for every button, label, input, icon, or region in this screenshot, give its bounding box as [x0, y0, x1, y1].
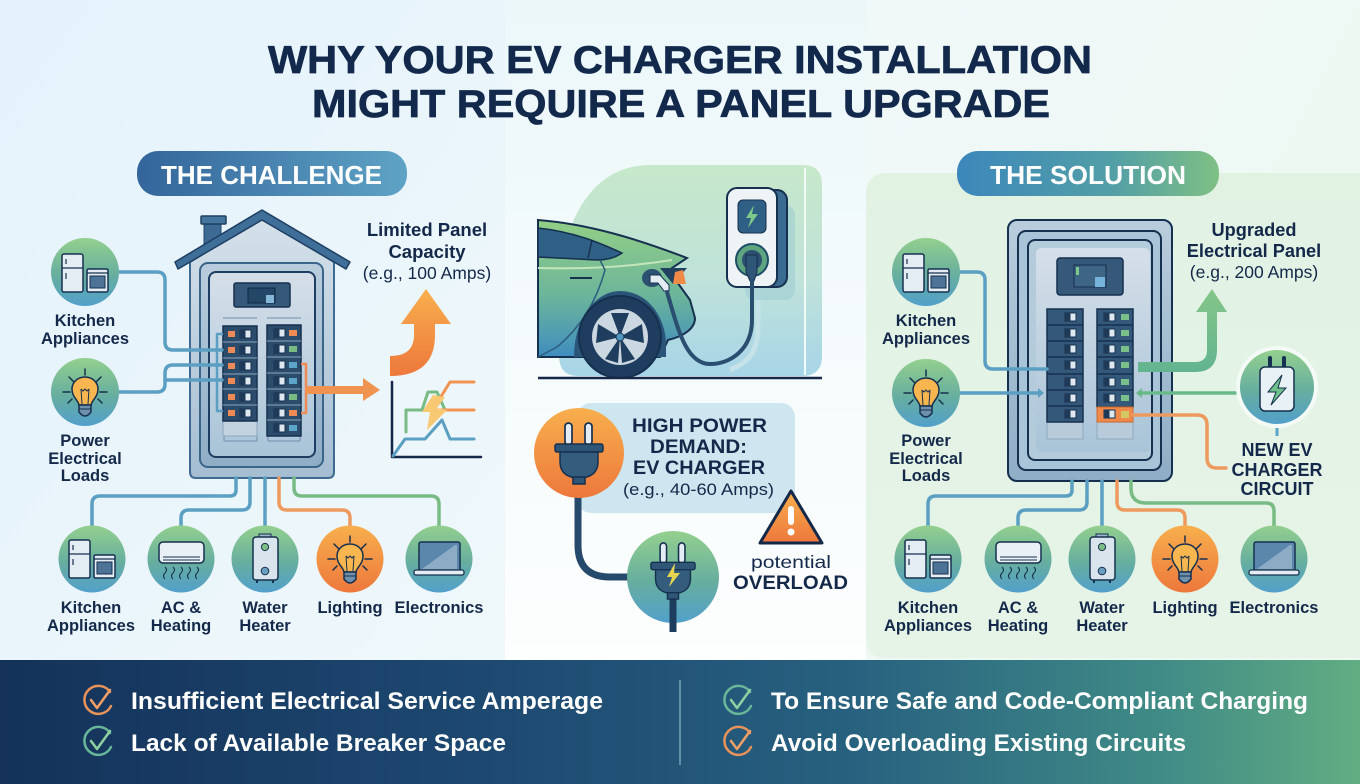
wires: right side: [928, 272, 1274, 526]
callout: upgraded electrical panel: Upgraded: [1212, 220, 1296, 240]
load: kitchen appliances: Kitchen: [898, 599, 958, 617]
callout: limited panel capacity: Capacity: [388, 241, 466, 262]
heading: the challenge: [137, 151, 407, 196]
label: potential overload: [733, 552, 848, 594]
callout: high power demand: [577, 403, 795, 513]
charger shadow: [730, 205, 795, 370]
upgraded panel: [1008, 220, 1172, 481]
callout: upgraded electrical panel: Electrical Panel: [1187, 241, 1321, 261]
house walls: [190, 218, 334, 478]
label: potential overload: OVERLOAD: [733, 573, 848, 594]
electrical panel: [200, 263, 323, 467]
label: new EV charger circuit: NEW EV: [1241, 440, 1313, 460]
callout: high power demand: DEMAND:: [650, 437, 747, 458]
wires: panel to bottom loads: [92, 478, 439, 526]
load: lighting: Lighting: [317, 599, 383, 617]
load: kitchen appliances: Appliances: [47, 617, 135, 635]
car tail light: [660, 268, 687, 284]
text: insufficient amperage: Insufficient Electrical Service Amperage: [131, 688, 603, 715]
load: lighting: [316, 526, 384, 617]
load: water heater: Water: [242, 599, 288, 617]
arrow: orange up arrow: [390, 289, 451, 376]
icon: warning triangle: [760, 491, 822, 543]
panel: the challenge background: [0, 0, 505, 658]
icon: chimney: [201, 216, 226, 247]
load: lighting: [1152, 526, 1218, 617]
icon: power electrical loads: [51, 358, 119, 426]
panel display: [234, 283, 290, 307]
footer divider: [679, 680, 681, 765]
load: water heater: Heater: [1076, 617, 1128, 635]
label: power electrical loads: Loads: [902, 467, 950, 485]
arrow: overload to chart: [301, 364, 380, 413]
panel: the solution background: [866, 173, 1360, 658]
load: electronics: [395, 526, 483, 617]
load: kitchen appliances: [47, 526, 135, 635]
label: power electrical loads: Electrical: [48, 450, 122, 468]
roof: [175, 210, 350, 269]
illustration: EV charging at wall: [538, 165, 822, 378]
load: AC and heating: [984, 526, 1052, 635]
check: lack of breaker space: [84, 727, 111, 755]
label: power electrical loads: Power: [60, 432, 110, 450]
load: AC and heating: AC &: [161, 599, 201, 617]
icon: new EV circuit: [1236, 346, 1318, 436]
car window: [538, 228, 622, 260]
ground line: [538, 377, 822, 379]
arrow: green up arrow: [1138, 289, 1227, 372]
load: lighting: Lighting: [1152, 599, 1218, 617]
breakers: left column: [223, 326, 257, 421]
load: electronics: [1230, 526, 1318, 617]
callout: limited panel capacity: (e.g., 100 Amps): [363, 263, 491, 283]
wires: left side loads to panel: [119, 272, 222, 411]
title: [268, 39, 1092, 126]
label: kitchen appliances: Appliances: [41, 330, 129, 348]
panel display: [1057, 258, 1123, 295]
load: kitchen appliances: Appliances: [884, 617, 972, 635]
callout: high power demand: HIGH POWER: [632, 416, 767, 437]
load: kitchen appliances: [884, 526, 972, 635]
charger unit: [727, 188, 787, 287]
check: avoid overloading: [724, 727, 751, 755]
callout: upgraded electrical panel: (e.g., 200 Amps): [1190, 262, 1318, 282]
label: power electrical loads: Power: [901, 432, 951, 450]
callout: upgraded electrical panel: [1187, 220, 1321, 282]
icon: kitchen appliances: [892, 238, 960, 306]
label: power electrical loads: Electrical: [889, 450, 963, 468]
label: power electrical loads: Loads: [61, 467, 109, 485]
label: potential overload: potential: [751, 552, 831, 572]
check: insufficient amperage: [84, 686, 111, 714]
callout: high power demand: EV CHARGER: [633, 458, 765, 479]
wall backdrop: [559, 165, 822, 376]
load: water heater: Heater: [239, 617, 291, 635]
load: water heater: [1068, 526, 1136, 635]
callout: high power demand: (e.g., 40-60 Amps): [623, 480, 774, 499]
label: kitchen appliances: Kitchen: [55, 312, 115, 330]
callout: limited panel capacity: [363, 219, 491, 283]
text: safe and compliant: To Ensure Safe and Code-Compliant Charging: [771, 688, 1308, 715]
charge port: [642, 269, 669, 291]
icon: kitchen appliances: [51, 238, 119, 306]
load: AC and heating: AC &: [998, 599, 1038, 617]
car door line: [538, 240, 605, 357]
check: safe and compliant: [724, 686, 751, 714]
callout: limited panel capacity: Limited Panel: [367, 219, 487, 240]
icon: orange plug: [534, 408, 624, 498]
label: kitchen appliances: Kitchen: [896, 312, 956, 330]
load: AC and heating: Heating: [988, 617, 1048, 635]
house with limited panel: [175, 210, 350, 478]
label: new EV charger circuit: CHARGER: [1231, 460, 1323, 480]
title: MIGHT REQUIRE A PANEL UPGRADE: [312, 83, 1050, 126]
car wheel: [574, 291, 666, 378]
icon: green plug: [627, 531, 719, 632]
label: new EV charger circuit: CIRCUIT: [1240, 479, 1314, 499]
load: kitchen appliances: Kitchen: [61, 599, 121, 617]
charging cable: [667, 281, 752, 364]
load: water heater: [232, 526, 298, 635]
car body: [538, 220, 695, 357]
cable between plugs: [578, 490, 630, 577]
title: WHY YOUR EV CHARGER INSTALLATION: [268, 39, 1092, 82]
load: electronics: Electronics: [395, 599, 483, 617]
breakers: right column: [1097, 309, 1133, 407]
label: kitchen appliances: Appliances: [882, 330, 970, 348]
icon: power electrical loads: [892, 359, 960, 427]
footer band: [0, 660, 1360, 784]
panel: center backdrop: [505, 0, 866, 660]
load: AC and heating: [148, 526, 214, 635]
load: electronics: Electronics: [1230, 599, 1318, 617]
heading: the challenge: THE CHALLENGE: [161, 160, 382, 190]
heading: the solution: [957, 151, 1219, 196]
breakers: right column: [267, 325, 301, 436]
chart: overload graph: [392, 382, 481, 457]
load: AC and heating: Heating: [151, 617, 211, 635]
new EV breaker: [1097, 407, 1133, 422]
text: lack of breaker space: Lack of Available Breaker Space: [131, 730, 506, 757]
car highlight: [538, 260, 672, 268]
breakers: left column: [1047, 309, 1083, 422]
heading: the solution: THE SOLUTION: [990, 160, 1186, 190]
text: avoid overloading: Avoid Overloading Existing Circuits: [771, 730, 1186, 757]
load: water heater: Water: [1079, 599, 1125, 617]
